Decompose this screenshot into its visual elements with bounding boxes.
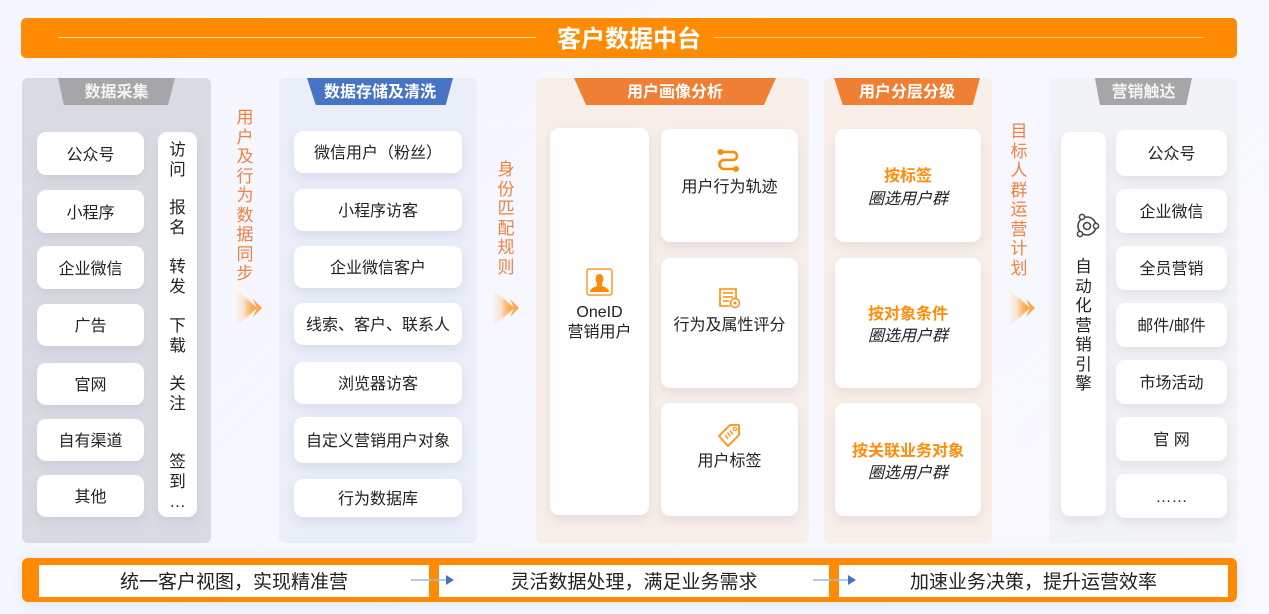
card: 小程序访客 bbox=[294, 189, 462, 231]
text: 按标签: 按标签 bbox=[884, 168, 932, 185]
text: 自动化营销引擎: 自 bbox=[1075, 258, 1092, 276]
text: 签到: 到 bbox=[169, 473, 186, 491]
card: 自有渠道: 自有渠道 bbox=[58, 433, 122, 450]
icon: tag bbox=[718, 424, 740, 447]
text: 访问 bbox=[169, 141, 186, 179]
text: 转发: 转 bbox=[169, 258, 186, 276]
text: 访问: 访 bbox=[169, 141, 186, 159]
card: behaviour trail bbox=[661, 129, 798, 242]
card: by object condition bbox=[835, 258, 981, 388]
card: 企业微信: 企业微信 bbox=[58, 260, 122, 278]
label: target audience plan: 营 bbox=[1010, 220, 1028, 238]
label: user behaviour sync bbox=[236, 108, 254, 283]
text: 行为及属性评分: 行为及属性评分 bbox=[673, 317, 786, 334]
card: by related object bbox=[835, 403, 981, 516]
card: 其他: 其他 bbox=[74, 489, 106, 506]
arrow: chevron 3 bbox=[1010, 290, 1035, 326]
label: user behaviour sync: 数 bbox=[236, 206, 254, 224]
card: 公众号: 公众号 bbox=[1147, 146, 1196, 163]
card: 官网: 官网 bbox=[74, 377, 106, 394]
label: identity matching rules: 配 bbox=[498, 218, 514, 238]
label: target audience plan: 群 bbox=[1010, 180, 1028, 200]
card: 小程序 bbox=[37, 190, 144, 233]
benefit: unified view bbox=[39, 565, 429, 597]
card: 企业微信 bbox=[1116, 189, 1227, 233]
text: OneID 营销用户: 营销用户 bbox=[567, 324, 632, 341]
text: 下载 bbox=[169, 317, 186, 355]
heading: user profile analysis: 用户画像分析 bbox=[627, 84, 723, 100]
text: 自动化营销引擎: 营 bbox=[1075, 316, 1092, 334]
text: 自动化营销引擎: 销 bbox=[1075, 336, 1092, 354]
card: 公众号 bbox=[37, 132, 144, 175]
panel: user tiering bbox=[824, 78, 992, 543]
card: 公众号: 公众号 bbox=[66, 146, 114, 164]
card: 自定义营销用户对象: 自定义营销用户对象 bbox=[306, 433, 450, 450]
label: target audience plan bbox=[1010, 122, 1028, 278]
text: 签到 bbox=[169, 452, 186, 491]
card: 微信用户（粉丝）: 微信用户（粉丝） bbox=[314, 145, 442, 162]
card: ellipsis bbox=[1116, 474, 1227, 518]
arrow: bottom 1 bbox=[411, 575, 454, 585]
text: 关注: 注 bbox=[169, 395, 186, 413]
label: identity matching rules: 规 bbox=[498, 238, 514, 257]
panel: storage and cleansing bbox=[279, 78, 477, 543]
card: 广告: 广告 bbox=[74, 318, 106, 335]
text: OneID 营销用户: OneID bbox=[576, 304, 623, 321]
card: user tags bbox=[661, 403, 798, 516]
text: 圈选用户群: 圈选用户群 bbox=[868, 328, 948, 345]
icon: trail path bbox=[718, 149, 739, 172]
heading: user tiering: 用户分层分级 bbox=[859, 84, 955, 100]
text: 自动化营销引擎: 擎 bbox=[1075, 375, 1092, 393]
benefit: faster decisions: 加速业务决策，提升运营效率 bbox=[910, 572, 1157, 592]
text: 自动化营销引擎 bbox=[1075, 258, 1092, 393]
text: 关注 bbox=[169, 375, 186, 413]
card: 全员营销: 全员营销 bbox=[1139, 261, 1204, 278]
heading: storage and cleansing: 数据存储及清洗 bbox=[324, 84, 436, 100]
card: 公众号 bbox=[1116, 130, 1227, 176]
card: 企业微信客户 bbox=[294, 246, 462, 288]
label: user behaviour sync: 用 bbox=[236, 108, 254, 127]
card: 微信用户（粉丝） bbox=[294, 131, 462, 173]
label: target audience plan: 人 bbox=[1010, 161, 1028, 180]
benefit: flexible data: 灵活数据处理，满足业务需求 bbox=[510, 572, 758, 592]
label: user behaviour sync: 为 bbox=[236, 186, 254, 205]
panel: user profile analysis bbox=[536, 78, 809, 543]
label: user behaviour sync: 步 bbox=[236, 264, 254, 283]
panel: data collection bbox=[22, 78, 211, 543]
card: ellipsis: …… bbox=[1156, 489, 1188, 506]
card: 自定义营销用户对象 bbox=[294, 417, 462, 463]
card: behaviours column bbox=[158, 132, 197, 517]
text: 转发 bbox=[169, 258, 186, 296]
label: identity matching rules bbox=[498, 160, 514, 276]
label: user behaviour sync: 据 bbox=[236, 225, 254, 244]
card: 小程序访客: 小程序访客 bbox=[338, 203, 418, 220]
title banner bbox=[21, 18, 1237, 58]
card: 小程序: 小程序 bbox=[66, 204, 114, 222]
text: 圈选用户群: 圈选用户群 bbox=[868, 191, 948, 208]
card: 邮件/邮件: 邮件/邮件 bbox=[1137, 318, 1206, 335]
title line right bbox=[713, 37, 1204, 38]
text: 报名: 报 bbox=[169, 199, 186, 217]
label: target audience plan: 运 bbox=[1010, 200, 1028, 219]
card: 全员营销 bbox=[1116, 246, 1227, 290]
text: 自动化营销引擎: 化 bbox=[1075, 297, 1092, 315]
title text: 客户数据中台 bbox=[557, 26, 701, 53]
card: 广告 bbox=[37, 304, 144, 346]
icon: engine bbox=[1076, 214, 1100, 238]
benefit: faster decisions bbox=[839, 565, 1228, 597]
card: 企业微信 bbox=[37, 246, 144, 289]
card: 市场活动 bbox=[1116, 360, 1227, 404]
icon: score sheet bbox=[719, 288, 740, 308]
label: identity matching rules: 份 bbox=[498, 180, 514, 198]
label: user behaviour sync: 户 bbox=[236, 128, 254, 146]
text: 按关联业务对象: 按关联业务对象 bbox=[852, 443, 964, 460]
card: 邮件/邮件 bbox=[1116, 303, 1227, 347]
card: behaviour scoring bbox=[661, 258, 798, 388]
heading: marketing reach bbox=[1095, 78, 1192, 105]
card: 官 网 bbox=[1116, 417, 1227, 461]
benefit: flexible data bbox=[439, 565, 829, 597]
card: 线索、客户、联系人 bbox=[294, 303, 462, 345]
label: target audience plan: 计 bbox=[1010, 239, 1028, 258]
text: 访问: 问 bbox=[169, 161, 186, 179]
card: 行为数据库 bbox=[294, 479, 462, 517]
label: identity matching rules: 身 bbox=[498, 160, 514, 179]
text: 关注: 关 bbox=[169, 375, 186, 393]
text: 按对象条件: 按对象条件 bbox=[868, 306, 948, 323]
card: 线索、客户、联系人: 线索、客户、联系人 bbox=[306, 317, 450, 334]
text: 圈选用户群: 圈选用户群 bbox=[868, 465, 948, 482]
text: 用户行为轨迹: 用户行为轨迹 bbox=[681, 179, 778, 196]
card: 官 网: 官 网 bbox=[1153, 432, 1190, 449]
label: identity matching rules: 则 bbox=[498, 258, 514, 276]
text: 签到: 签 bbox=[169, 453, 186, 471]
text: 下载: 下 bbox=[169, 317, 186, 335]
arrow: chevron 2 bbox=[494, 290, 519, 326]
card: 浏览器访客 bbox=[294, 362, 462, 404]
label: user behaviour sync: 同 bbox=[236, 244, 254, 264]
card: automation engine bbox=[1061, 132, 1106, 516]
label: target audience plan: 标 bbox=[1010, 142, 1028, 160]
card: 市场活动: 市场活动 bbox=[1139, 375, 1204, 392]
panel: marketing reach bbox=[1049, 78, 1237, 543]
arrow: chevron 1 bbox=[236, 290, 262, 326]
card: 自有渠道 bbox=[37, 419, 144, 461]
heading: marketing reach: 营销触达 bbox=[1111, 84, 1176, 100]
heading: user tiering bbox=[834, 78, 980, 105]
title line left bbox=[58, 37, 536, 38]
card: 官网 bbox=[37, 363, 144, 405]
text: ellipsis: … bbox=[169, 493, 186, 511]
heading: user profile analysis bbox=[574, 78, 776, 105]
icon: user portrait bbox=[586, 268, 613, 296]
card: 行为数据库: 行为数据库 bbox=[338, 491, 418, 508]
label: user behaviour sync: 及 bbox=[236, 147, 254, 166]
heading: storage and cleansing bbox=[307, 78, 453, 105]
label: target audience plan: 划 bbox=[1010, 258, 1028, 278]
arrow: bottom 2 bbox=[813, 575, 856, 585]
card: 企业微信客户: 企业微信客户 bbox=[330, 260, 426, 277]
text: 下载: 载 bbox=[169, 337, 186, 355]
text: 自动化营销引擎: 引 bbox=[1075, 356, 1092, 374]
text: 自动化营销引擎: 动 bbox=[1075, 278, 1092, 296]
text: 用户标签: 用户标签 bbox=[697, 453, 762, 470]
label: target audience plan: 目 bbox=[1010, 122, 1028, 141]
label: identity matching rules: 匹 bbox=[498, 199, 514, 218]
heading: data collection: 数据采集 bbox=[84, 84, 148, 100]
card: OneID bbox=[550, 128, 649, 515]
label: user behaviour sync: 行 bbox=[236, 166, 254, 186]
text: 转发: 发 bbox=[169, 278, 186, 296]
text: OneID 营销用户 bbox=[567, 304, 632, 341]
card: 企业微信: 企业微信 bbox=[1139, 204, 1204, 221]
card: by tag bbox=[835, 129, 981, 242]
bottom bar background bbox=[22, 558, 1237, 602]
heading: data collection bbox=[58, 78, 175, 105]
card: 其他 bbox=[37, 475, 144, 517]
card: 浏览器访客: 浏览器访客 bbox=[338, 376, 418, 393]
benefit: unified view: 统一客户视图，实现精准营 bbox=[120, 572, 348, 592]
text: 报名 bbox=[169, 198, 186, 237]
text: 报名: 名 bbox=[169, 219, 186, 237]
